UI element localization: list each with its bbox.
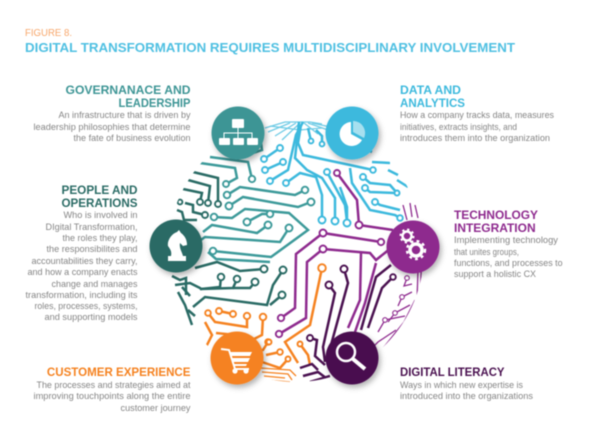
text: data and analytics: ANALYTICS: [400, 96, 465, 110]
text: technology integration: INTEGRATION: [454, 221, 536, 235]
text: customer experience: [34, 365, 191, 413]
text: customer experience: customer journey: [120, 403, 191, 413]
text: people and operations: the roles they play,: [62, 233, 138, 243]
text: people and operations: DIgital Transformation,: [46, 222, 138, 232]
blue fan at globe top: [265, 122, 335, 140]
text: data and analytics: initiatives, extracts insights, and: [400, 122, 517, 132]
blue traces: [261, 122, 408, 226]
text: governance: [34, 83, 191, 143]
teal traces: [198, 135, 314, 262]
text: governance: An infrastructure that is driven by: [58, 110, 191, 120]
title: DIGITAL TRANSFORMATION REQUIRES MULTIDISCIPLINARY INVOLVEMENT: [25, 40, 515, 55]
text: people and operations: accountabilities they carry,: [32, 256, 138, 266]
text: governance: LEADERSHIP: [118, 96, 191, 110]
text: people and operations: the responsibilites and: [46, 244, 138, 254]
text: data and analytics: How a company tracks data, measures: [400, 110, 554, 120]
purple traces: [276, 170, 393, 337]
text: technology integration: functions, and processes to: [454, 258, 563, 268]
text: governance: GOVERNANACE AND: [66, 83, 191, 97]
icon: data pie chart: [326, 106, 378, 160]
text: data and analytics: introduces them into the organization: [400, 133, 550, 143]
icon: literacy magnifier: [326, 332, 378, 384]
text: people and operations: and supporting models: [44, 312, 138, 322]
text: people and operations: roles, processes, systems,: [34, 301, 138, 311]
text: technology integration: support a holistic CX: [454, 269, 536, 279]
text: people and operations: change and manages: [52, 279, 138, 289]
text: people and operations: Who is involved in: [64, 210, 138, 220]
text: technology integration: Implementing technology: [454, 235, 558, 245]
icon: customer shopping cart: [210, 332, 264, 384]
purple edge traces: [370, 203, 422, 352]
text: data and analytics: DATA AND: [400, 83, 461, 97]
text: technology integration: [454, 208, 563, 279]
text: governance: the fate of business evolution: [74, 133, 190, 143]
orange fine traces: [260, 366, 297, 383]
text: people and operations: PEOPLE AND: [62, 183, 138, 197]
text: people and operations: [26, 183, 138, 322]
icon: governance org chart: [212, 106, 264, 160]
orange traces: [205, 264, 326, 368]
text: technology integration: TECHNOLOGY: [454, 208, 538, 222]
text: people and operations: OPERATIONS: [62, 196, 138, 210]
text: data and analytics: [400, 83, 554, 143]
text: digital literacy: [400, 365, 533, 401]
circuit globe: [172, 122, 422, 382]
text: digital literacy: Ways in which new expertise is: [400, 380, 523, 390]
icon: people chess knight: [150, 220, 202, 272]
figure label: FIGURE 8.: [25, 27, 72, 39]
text: technology integration: that unites groups,: [454, 247, 519, 257]
text: customer experience: The processes and strategies aimed at: [36, 380, 191, 390]
dark purple traces: [300, 265, 396, 382]
text: digital literacy: introduced into the organizations: [400, 391, 533, 401]
text: digital literacy: DIGITAL LITERACY: [400, 365, 505, 379]
text: customer experience: CUSTOMER EXPERIENCE: [47, 365, 191, 379]
text: customer experience: improving touchpoints along the entire: [34, 391, 190, 401]
icon: technology gears: [386, 220, 440, 274]
dark teal traces: [172, 172, 286, 340]
text: people and operations: and how a company enacts: [28, 267, 138, 277]
text: people and operations: transformation, including its: [26, 290, 138, 300]
text: governance: leadership philosophies that determine: [34, 122, 190, 132]
